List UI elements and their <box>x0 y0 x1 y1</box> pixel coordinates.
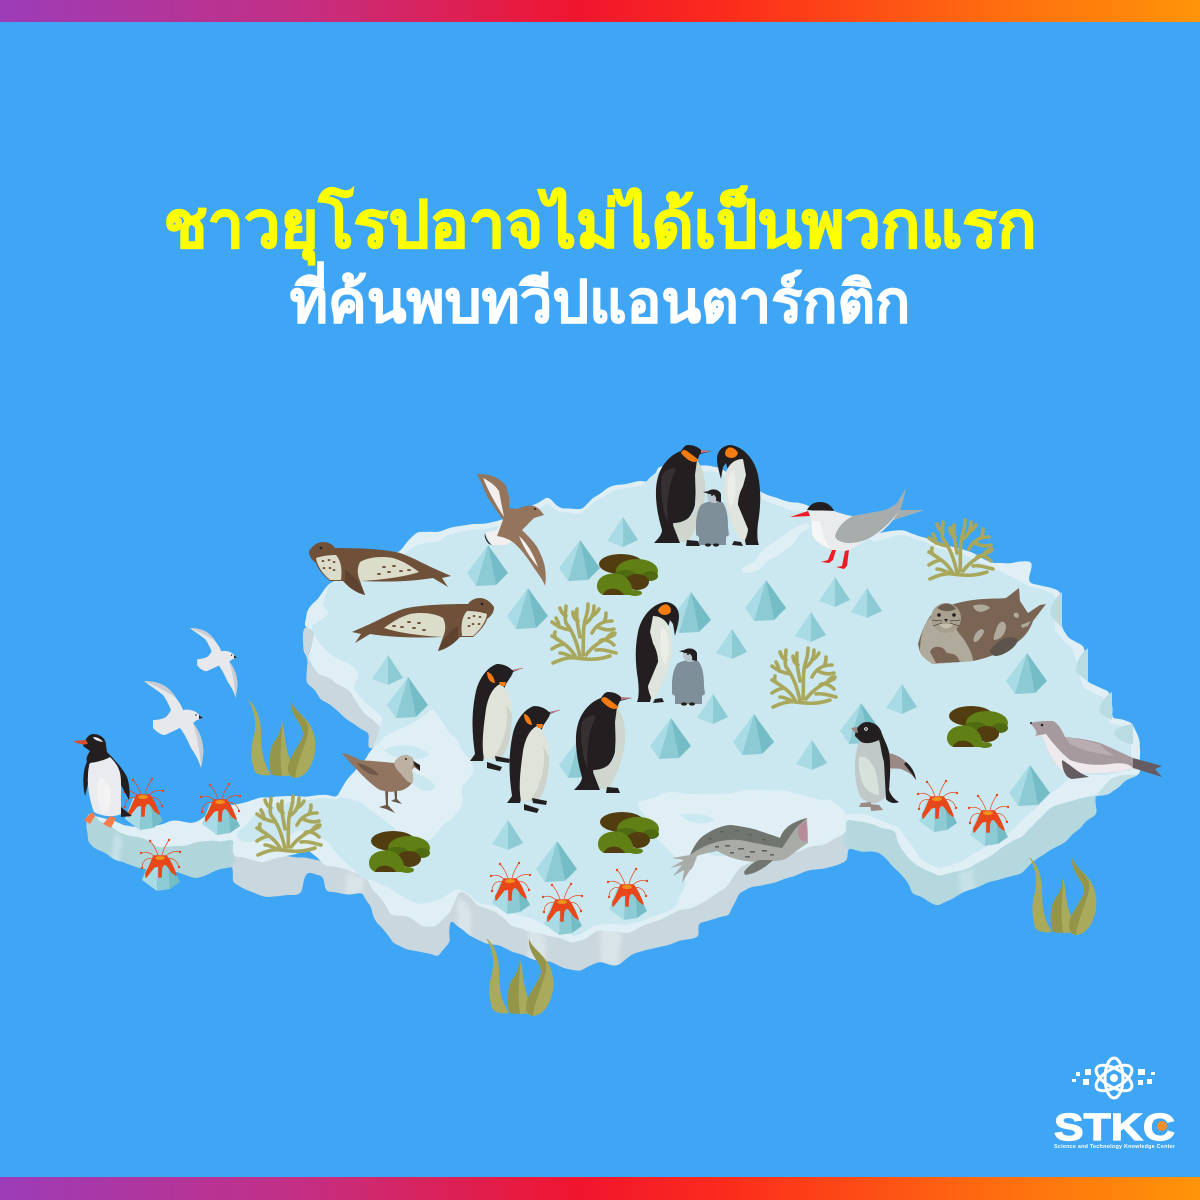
blue swirls on ice <box>348 745 728 856</box>
arctic tern <box>790 488 924 569</box>
volcanoes <box>123 778 1009 935</box>
crabeater seal <box>1030 721 1162 779</box>
title line 2: ที่ค้นพบทวีปแอนตาร์กติก <box>290 270 910 335</box>
brown petrel in flight <box>477 474 546 586</box>
ice pyramids <box>372 517 1050 882</box>
leopard seal <box>670 818 808 883</box>
adelie penguin <box>851 722 916 811</box>
right shore ice notches <box>1050 592 1133 744</box>
moss clumps <box>369 554 1008 873</box>
kelp <box>248 700 1096 1016</box>
STKC logo: STKC <box>1054 1107 1175 1149</box>
bottom gradient bar <box>0 1177 1200 1200</box>
ice shelf side walls <box>87 627 1140 973</box>
seal 1 <box>309 542 451 595</box>
gentoo penguin <box>73 734 132 828</box>
weddell seal <box>918 588 1046 664</box>
ice surface rim <box>87 465 1140 943</box>
light ice patches <box>340 525 846 910</box>
corals <box>257 520 993 855</box>
king penguins <box>470 664 560 813</box>
ice surface main <box>236 470 1133 935</box>
emperor penguin with chick <box>636 602 705 706</box>
snow petrel 1 <box>144 681 203 768</box>
seal 2 <box>352 598 494 651</box>
emperor penguin centre <box>574 692 632 793</box>
title line 1: ชาวยุโรปอาจไม่ได้เป็นพวกแรก <box>163 188 1037 261</box>
emperor penguin family <box>654 445 760 547</box>
skua <box>342 753 420 813</box>
snow petrel 2 <box>190 628 237 698</box>
STKC logo: Science and Technology Knowledge Center <box>1054 1144 1176 1150</box>
title <box>163 185 1037 335</box>
top gradient bar <box>0 0 1200 22</box>
